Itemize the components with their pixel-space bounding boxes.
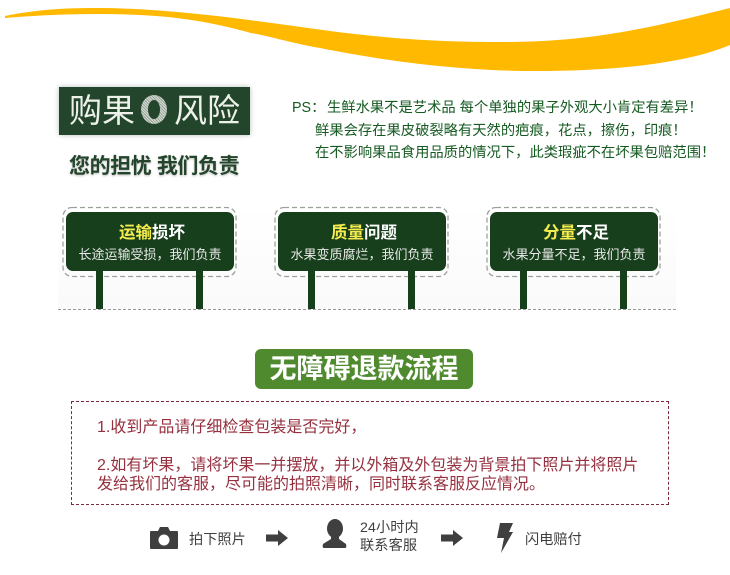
step label: contact service <box>360 520 419 554</box>
yellow wave banner <box>5 8 730 71</box>
step 2 <box>97 456 638 493</box>
sign: quality problem: 质量问题 <box>331 224 397 242</box>
sign: short weight: 水果分量不足，我们负责 <box>502 247 646 262</box>
ground dashed line <box>58 309 676 310</box>
sign: quality problem: 水果变质腐烂，我们负责 <box>290 247 434 262</box>
arrow 2 <box>441 530 463 546</box>
step 2: 2.如有坏果，请将坏果一并摆放，并以外箱及外包装为背景拍下照片并将照片 <box>97 457 638 474</box>
sign: short weight: 分量不足 <box>543 224 609 242</box>
heading text left: 购果 <box>69 92 135 129</box>
arrow 1 <box>266 530 288 546</box>
faint backdrop behind signs <box>58 205 676 309</box>
refund instructions box <box>71 401 669 505</box>
PS line 2: 鲜果会存在果皮破裂略有天然的疤痕，花点，擦伤，印痕！ <box>315 123 687 139</box>
step label: fast payout: 闪电赔付 <box>525 532 582 548</box>
PS line 1: 生鲜水果不是艺术品 每个单独的果子外观大小肯定有差异！ <box>327 100 703 116</box>
step label: contact service: 联系客服 <box>360 538 417 554</box>
step label: take photo: 拍下照片 <box>189 532 246 548</box>
PS label: PS： <box>292 100 325 116</box>
icon: lightning <box>497 523 513 553</box>
sign: transport damage: 运输损坏 <box>119 224 185 242</box>
PS line 3: 在不影响果品食用品质的情况下，此类瑕疵不在坏果包赔范围！ <box>315 145 715 161</box>
subheading: 您的担忧 我们负责 <box>69 155 239 178</box>
sign: short weight <box>486 206 661 309</box>
icon: person <box>322 519 346 548</box>
sign: transport damage <box>62 206 237 309</box>
refund process title: 无障碍退款流程 <box>270 354 458 384</box>
step 1: 1.收到产品请仔细检查包装是否完好， <box>97 419 366 436</box>
icon: camera <box>150 527 178 549</box>
heading banner: 购果 O 风险 <box>59 87 250 135</box>
heading text right: 风险 <box>174 92 240 129</box>
refund process title <box>255 349 473 389</box>
step 2: 发给我们的客服，尽可能的拍照清晰，同时联系客服反应情况。 <box>97 476 545 493</box>
icon: round fruit emblem <box>141 95 167 124</box>
sign: quality problem <box>274 206 449 309</box>
PS note text <box>292 100 715 161</box>
step label: contact service: 24小时内 <box>360 520 419 536</box>
sign: transport damage: 长途运输受损，我们负责 <box>78 247 222 262</box>
